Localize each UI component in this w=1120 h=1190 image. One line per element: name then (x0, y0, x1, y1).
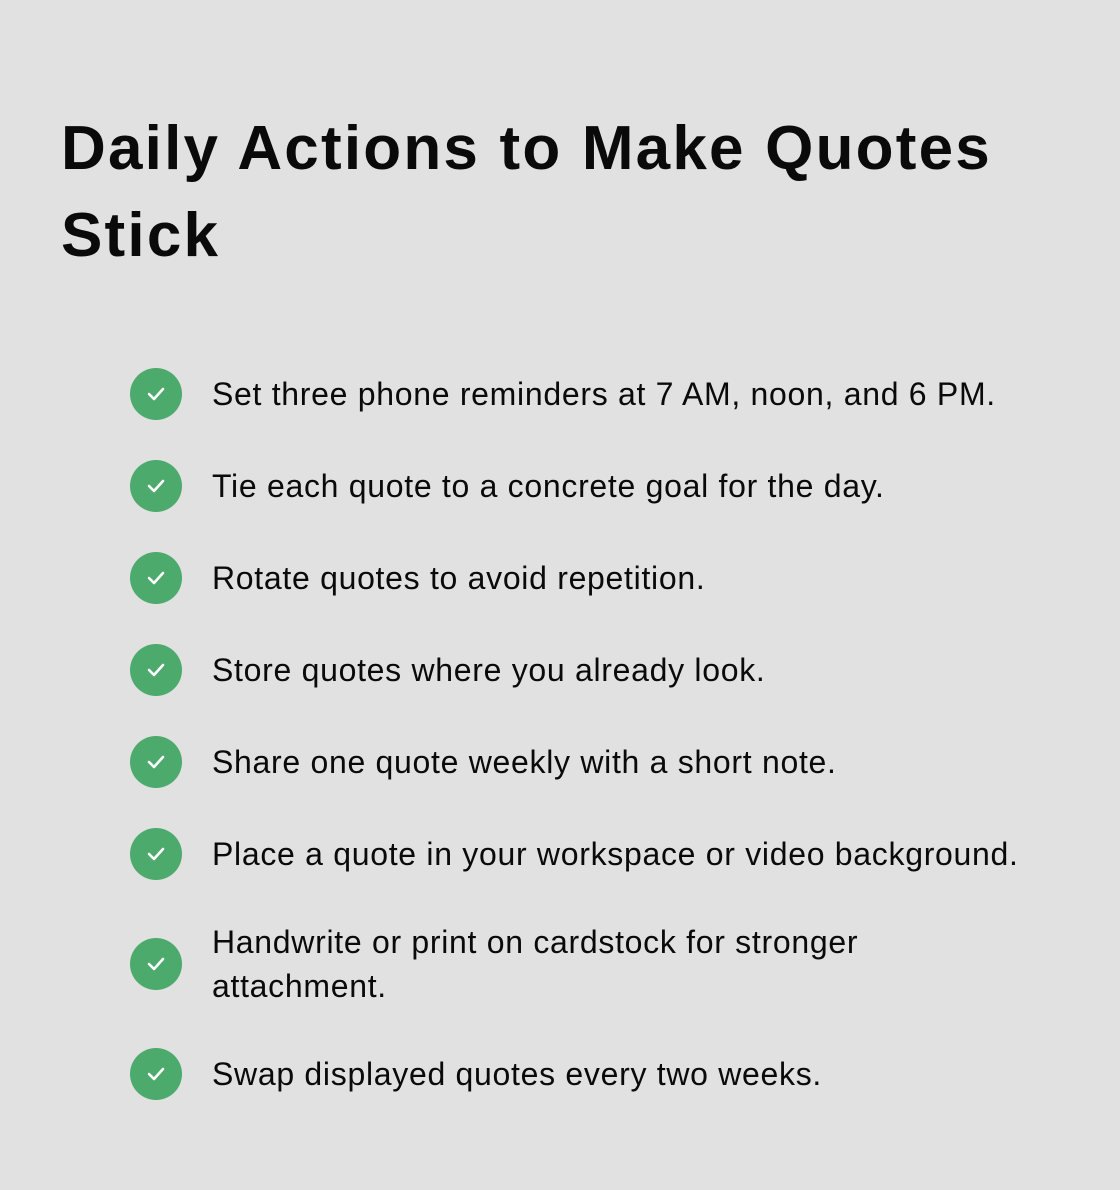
item 4 (130, 644, 766, 696)
item 7 (130, 924, 858, 1004)
title (61, 114, 992, 270)
item 3: Rotate quotes to avoid repetition. (212, 560, 705, 596)
item 5: Share one quote weekly with a short note. (212, 744, 837, 780)
item 7: attachment. (212, 968, 387, 1004)
item 1: Set three phone reminders at 7 AM, noon, and 6 PM. (212, 376, 996, 412)
item 6: Place a quote in your workspace or video background. (212, 836, 1019, 872)
item 8 (130, 1048, 822, 1100)
item 4: Store quotes where you already look. (212, 652, 766, 688)
item 2 (130, 460, 885, 512)
title: Daily Actions to Make Quotes (61, 114, 992, 183)
item 1 (130, 368, 996, 420)
item 5 (130, 736, 837, 788)
item 6 (130, 828, 1019, 880)
title: Stick (61, 201, 220, 270)
item 8: Swap displayed quotes every two weeks. (212, 1056, 822, 1092)
item 2: Tie each quote to a concrete goal for the day. (212, 468, 885, 504)
item 3 (130, 552, 705, 604)
item 7: Handwrite or print on cardstock for stronger (212, 924, 858, 960)
